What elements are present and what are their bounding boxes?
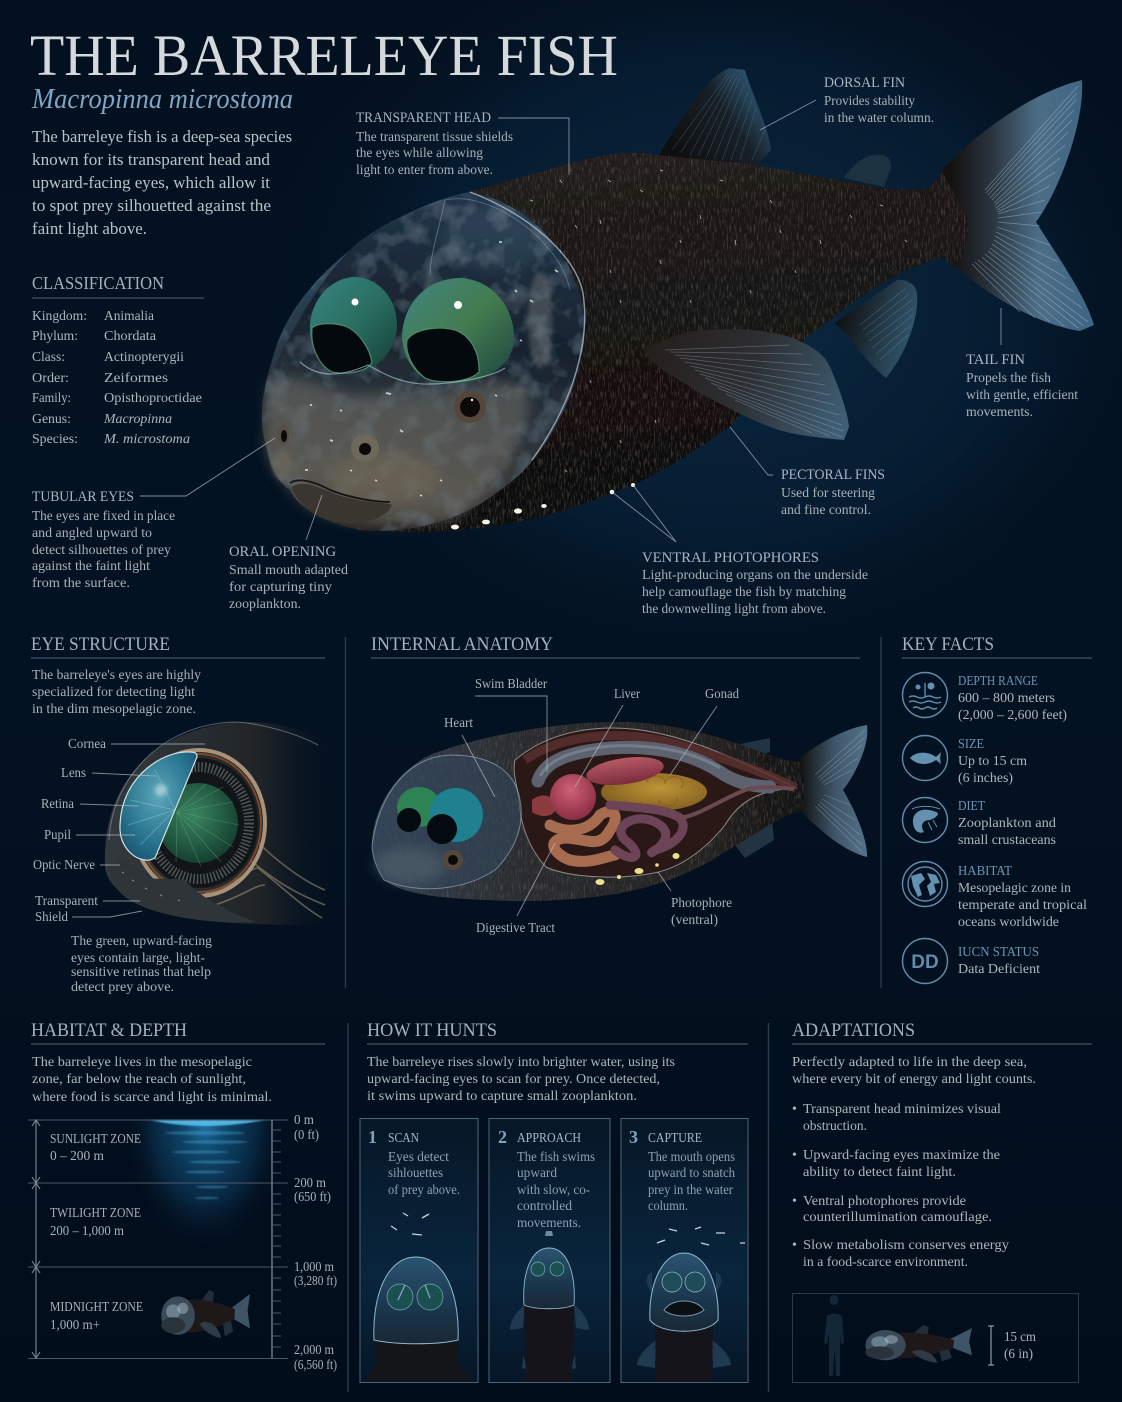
label: pectoral fins: Used for steering xyxy=(781,485,875,500)
depth scale labels: (6,560 ft) xyxy=(294,1357,337,1372)
anatomy head dome xyxy=(372,755,521,889)
panel: habitat and depth xyxy=(28,1020,337,1372)
label: ventral photophores: the downwelling light from above. xyxy=(642,601,826,616)
top-view fish: capture xyxy=(637,1253,731,1381)
label: tail fin xyxy=(966,308,1078,419)
left tubular eye xyxy=(310,277,397,373)
adaptations list: Upward-facing eyes maximize the xyxy=(803,1148,1000,1163)
depth scale labels: 0 m xyxy=(294,1112,314,1127)
adaptations list: in a food-scarce environment. xyxy=(803,1255,968,1270)
label: tubular eyes: The eyes are fixed in place xyxy=(32,508,175,523)
intro text xyxy=(32,127,292,238)
depth scale labels: (650 ft) xyxy=(294,1189,331,1204)
small fish in midnight zone xyxy=(161,1290,250,1338)
real eye xyxy=(454,391,486,423)
right tubular eye xyxy=(402,278,514,383)
intro text: The barreleye fish is a deep-sea species xyxy=(32,127,292,146)
anatomy labels: Digestive Tract xyxy=(476,920,555,935)
sunlight beam xyxy=(100,1120,272,1270)
eye part labels: Retina xyxy=(41,796,74,811)
stomach xyxy=(532,796,556,816)
card: approach: The fish swims xyxy=(517,1149,595,1164)
top-view fish: scan xyxy=(365,1257,472,1381)
label: oral opening: ORAL OPENING xyxy=(229,544,337,560)
adaptations list: • xyxy=(792,1194,797,1209)
intro text: faint light above. xyxy=(32,219,147,238)
anal fin xyxy=(835,280,917,378)
icon: shrimp xyxy=(902,798,948,842)
eye structure heading: EYE STRUCTURE xyxy=(31,634,170,655)
label: pectoral fins: PECTORAL FINS xyxy=(781,467,885,483)
zone labels: 200 – 1,000 m xyxy=(50,1223,124,1238)
eye structure intro: in the dim mesopelagic zone. xyxy=(32,701,196,716)
classification table: Macropinna xyxy=(103,412,172,427)
fact: iucn status: Data Deficient xyxy=(958,962,1040,977)
body cavity xyxy=(514,728,796,877)
card: scan: SCAN xyxy=(388,1130,419,1145)
zone labels: 0 – 200 m xyxy=(50,1148,104,1163)
eye part labels: Transparent xyxy=(35,893,98,908)
eye structure caption xyxy=(71,933,212,994)
ventral photophores dots xyxy=(451,483,635,529)
card: capture: The mouth opens xyxy=(648,1149,735,1164)
small rear dorsal fin xyxy=(844,155,891,187)
eye part labels: Pupil xyxy=(44,827,71,842)
zone labels: MIDNIGHT ZONE xyxy=(50,1299,143,1314)
hunts intro: The barreleye rises slowly into brighter water, using its xyxy=(367,1055,675,1070)
fact: diet xyxy=(902,798,1056,848)
anatomy labels: Heart xyxy=(444,715,473,730)
fact: iucn status: IUCN STATUS xyxy=(958,945,1039,960)
adaptations heading: ADAPTATIONS xyxy=(792,1020,915,1041)
card: approach: upward xyxy=(517,1165,557,1180)
card: scan: 1 xyxy=(368,1127,377,1147)
label: oral opening: Small mouth adapted xyxy=(229,562,348,577)
swim bladder xyxy=(538,747,770,787)
fact: diet: small crustaceans xyxy=(958,833,1056,848)
zone labels xyxy=(50,1131,143,1332)
retina ball xyxy=(158,783,238,863)
label: oral opening: for capturing tiny xyxy=(229,579,332,594)
classification table: Phylum: xyxy=(32,329,78,344)
label: tubular eyes: from the surface. xyxy=(32,575,130,590)
classification table xyxy=(32,309,202,447)
panel: adaptations xyxy=(792,1020,1092,1382)
tail fin xyxy=(935,80,1094,331)
fact: depth range xyxy=(902,672,1067,723)
top-view fish: approach xyxy=(510,1231,589,1381)
scale text: 15 cm xyxy=(1004,1330,1036,1345)
fact: iucn status xyxy=(902,938,1040,984)
habitat heading: HABITAT & DEPTH xyxy=(31,1020,187,1041)
classification table: Zeiformes xyxy=(104,371,168,386)
label: tail fin: with gentle, efficient xyxy=(966,387,1078,402)
head glints xyxy=(305,242,558,496)
adaptations list: Slow metabolism conserves energy xyxy=(803,1238,1009,1253)
eye part labels: Shield xyxy=(35,909,68,924)
anatomy fish illustration xyxy=(372,722,867,901)
label: tail fin: TAIL FIN xyxy=(966,352,1026,368)
scale bar xyxy=(988,1326,994,1365)
prey silhouettes xyxy=(657,1227,745,1245)
classification table: Genus: xyxy=(32,412,71,427)
hunts intro: upward-facing eyes to scan for prey. Once detected, xyxy=(367,1072,660,1087)
classification table: Chordata xyxy=(104,329,157,344)
intro text: to spot prey silhouetted against the xyxy=(32,196,271,215)
label: pectoral fins: and fine control. xyxy=(781,502,871,517)
card: capture: prey in the water xyxy=(648,1182,733,1197)
label: ventral photophores xyxy=(612,485,868,616)
eye structure caption: The green, upward-facing xyxy=(71,933,212,948)
anatomy eyes xyxy=(397,787,483,870)
fish body xyxy=(290,153,968,532)
icon: depth waves xyxy=(902,672,948,718)
icon: DD badge: DD xyxy=(911,952,939,973)
mouth and lower jaw xyxy=(272,450,392,524)
label: oral opening xyxy=(229,495,348,611)
anatomy labels xyxy=(444,676,739,935)
label: transparent head: light to enter from above. xyxy=(356,162,493,177)
card: capture xyxy=(621,1118,748,1382)
depth scale labels: 1,000 m xyxy=(294,1259,334,1274)
human silhouette xyxy=(824,1295,844,1376)
label: tail fin: movements. xyxy=(966,404,1033,419)
adaptations list xyxy=(792,1102,1009,1270)
fact: depth range: DEPTH RANGE xyxy=(958,674,1038,689)
eye part labels: Optic Nerve xyxy=(33,857,95,872)
habitat intro xyxy=(32,1055,272,1105)
face mass xyxy=(265,379,530,524)
anatomy tail xyxy=(795,725,867,857)
internal anatomy heading: INTERNAL ANATOMY xyxy=(371,634,553,655)
nostrils xyxy=(277,425,379,462)
adaptations list: • xyxy=(792,1102,797,1117)
hunts heading: HOW IT HUNTS xyxy=(367,1020,497,1041)
outer dome xyxy=(109,722,318,840)
classification panel xyxy=(32,273,204,447)
heart xyxy=(550,774,596,820)
card: approach: movements. xyxy=(517,1215,581,1230)
classification table: M. microstoma xyxy=(103,432,190,447)
label: oral opening: zooplankton. xyxy=(229,596,301,611)
habitat intro: zone, far below the reach of sunlight, xyxy=(32,1072,246,1087)
classification table: Opisthoproctidae xyxy=(104,391,202,406)
eye structure intro xyxy=(32,667,201,716)
adaptations list: • xyxy=(792,1148,797,1163)
classification table: Class: xyxy=(32,350,65,365)
anatomy photophores xyxy=(596,853,680,885)
panel: internal anatomy xyxy=(371,634,867,935)
label: dorsal fin: DORSAL FIN xyxy=(824,75,905,91)
snout and jaw xyxy=(108,859,255,922)
eye cross-section illustration xyxy=(105,722,327,925)
fact: depth range: 600 – 800 meters xyxy=(958,691,1055,706)
panel: how it hunts xyxy=(360,1020,748,1382)
label: tubular eyes: TUBULAR EYES xyxy=(32,489,134,505)
classification table: Actinopterygii xyxy=(104,350,184,365)
anatomy labels: (ventral) xyxy=(671,912,718,927)
label: ventral photophores: help camouflage the fish by matching xyxy=(642,584,846,599)
size comparison box xyxy=(792,1294,1078,1382)
card: capture: 3 xyxy=(629,1127,638,1147)
card: scan xyxy=(360,1118,478,1382)
classification table: Animalia xyxy=(104,309,155,324)
adaptations intro: Perfectly adapted to life in the deep sea, xyxy=(792,1055,1027,1070)
label: ventral photophores: VENTRAL PHOTOPHORES xyxy=(642,550,819,566)
gonad xyxy=(601,773,707,811)
depth scale labels: (3,280 ft) xyxy=(294,1273,337,1288)
adaptations list: Ventral photophores provide xyxy=(803,1194,966,1209)
classification table: Family: xyxy=(32,391,71,406)
anatomy labels: Photophore xyxy=(671,895,732,910)
depth scale labels xyxy=(294,1112,337,1372)
eye structure caption: eyes contain large, light- xyxy=(71,950,205,965)
adaptations intro: where every bit of energy and light counts. xyxy=(792,1072,1036,1087)
card: capture: column. xyxy=(648,1198,688,1213)
card: approach: with slow, co- xyxy=(517,1182,590,1197)
transparent head xyxy=(262,192,585,531)
comparison fish xyxy=(865,1325,972,1363)
lens xyxy=(120,752,197,860)
label: tubular eyes xyxy=(32,438,275,590)
anatomy labels: Liver xyxy=(614,686,640,701)
card: approach: 2 xyxy=(498,1127,507,1147)
depth scale labels: 2,000 m xyxy=(294,1342,334,1357)
label: transparent head xyxy=(356,110,569,177)
card: approach: controlled xyxy=(517,1198,572,1213)
card: scan: of prey above. xyxy=(388,1182,460,1197)
label: transparent head: The transparent tissue shields xyxy=(356,129,513,144)
habitat intro: The barreleye lives in the mesopelagic xyxy=(32,1055,252,1070)
fact: diet: DIET xyxy=(958,799,985,814)
anatomy fins xyxy=(725,738,774,858)
fact: habitat xyxy=(902,862,1087,930)
main fish illustration xyxy=(262,68,1094,532)
fact: size: SIZE xyxy=(958,737,984,752)
intro text: known for its transparent head and xyxy=(32,150,270,169)
anatomy body xyxy=(372,722,804,901)
fact: size xyxy=(902,736,1027,786)
anatomy labels: Swim Bladder xyxy=(475,676,547,691)
label: dorsal fin xyxy=(760,75,934,130)
label: ventral photophores: Light-producing organs on the underside xyxy=(642,567,868,582)
prey silhouettes xyxy=(391,1213,429,1235)
adaptations intro xyxy=(792,1055,1036,1087)
scientific name: Macropinna microstoma xyxy=(31,84,293,115)
fact: habitat: oceans worldwide xyxy=(958,915,1059,930)
depth scale labels: (0 ft) xyxy=(294,1127,319,1142)
fact: habitat: Mesopelagic zone in xyxy=(958,881,1071,896)
fact: diet: Zooplankton and xyxy=(958,816,1056,831)
panel: eye structure xyxy=(31,634,327,994)
dorsal fin xyxy=(658,68,771,165)
title: THE BARRELEYE FISH xyxy=(30,23,618,88)
liver xyxy=(585,753,665,789)
classification heading: CLASSIFICATION xyxy=(32,273,164,293)
adaptations list: ability to detect faint light. xyxy=(803,1165,956,1180)
zone labels: 1,000 m+ xyxy=(50,1317,100,1332)
zone labels: SUNLIGHT ZONE xyxy=(50,1131,141,1146)
fact: depth range: (2,000 – 2,600 feet) xyxy=(958,708,1067,723)
depth scale labels: 200 m xyxy=(294,1175,326,1190)
hunts intro: it swims upward to capture small zooplankton. xyxy=(367,1089,637,1104)
label: tubular eyes: detect silhouettes of prey xyxy=(32,542,171,557)
eye structure intro: specialized for detecting light xyxy=(32,684,195,699)
label: transparent head: the eyes while allowing xyxy=(356,145,483,160)
card: capture: upward to snatch xyxy=(648,1165,735,1180)
eye structure caption: sensitive retinas that help xyxy=(71,964,211,979)
eye structure intro: The barreleye's eyes are highly xyxy=(32,667,201,682)
card: capture: CAPTURE xyxy=(648,1130,702,1145)
card: scan: Eyes detect xyxy=(388,1149,449,1164)
adaptations list: obstruction. xyxy=(803,1119,867,1134)
label: dorsal fin: in the water column. xyxy=(824,110,934,125)
card: approach: APPROACH xyxy=(517,1130,581,1145)
pectoral fin xyxy=(645,329,849,440)
scale text xyxy=(1004,1330,1036,1362)
habitat intro: where food is scarce and light is minimal. xyxy=(32,1090,272,1105)
anatomy labels: Gonad xyxy=(705,686,739,701)
eye part labels: Cornea xyxy=(68,736,106,751)
label: tubular eyes: and angled upward to xyxy=(32,525,152,540)
fact: habitat: HABITAT xyxy=(958,864,1012,879)
panel: key facts xyxy=(902,634,1092,984)
body speckles xyxy=(530,170,907,472)
icon: globe xyxy=(902,862,948,906)
adaptations list: Transparent head minimizes visual xyxy=(803,1102,1001,1117)
eye part labels xyxy=(33,736,205,924)
key facts heading: KEY FACTS xyxy=(902,634,994,655)
fact: habitat: temperate and tropical xyxy=(958,898,1087,913)
classification table: Kingdom: xyxy=(32,309,87,324)
label: tubular eyes: against the faint light xyxy=(32,558,150,573)
classification table: Order: xyxy=(32,371,69,386)
eye part labels: Lens xyxy=(61,765,86,780)
zone labels: TWILIGHT ZONE xyxy=(50,1205,141,1220)
fact: size: (6 inches) xyxy=(958,771,1013,786)
label: tail fin: Propels the fish xyxy=(966,370,1051,385)
fact: size: Up to 15 cm xyxy=(958,754,1027,769)
label: transparent head: TRANSPARENT HEAD xyxy=(356,110,491,126)
depth chart xyxy=(28,1112,337,1372)
label: dorsal fin: Provides stability xyxy=(824,93,915,108)
label: pectoral fins xyxy=(730,427,885,517)
scale text: (6 in) xyxy=(1004,1347,1033,1362)
adaptations list: • xyxy=(792,1238,797,1253)
classification table: Species: xyxy=(32,432,78,447)
card: approach xyxy=(489,1118,610,1382)
eye structure caption: detect prey above. xyxy=(71,979,174,994)
card: scan: sihlouettes xyxy=(388,1165,443,1180)
intestines xyxy=(550,787,792,861)
icon: fish xyxy=(902,736,948,780)
hunts intro xyxy=(367,1055,675,1104)
intro text: upward-facing eyes, which allow it xyxy=(32,173,270,192)
adaptations list: counterillumination camouflage. xyxy=(803,1210,992,1225)
